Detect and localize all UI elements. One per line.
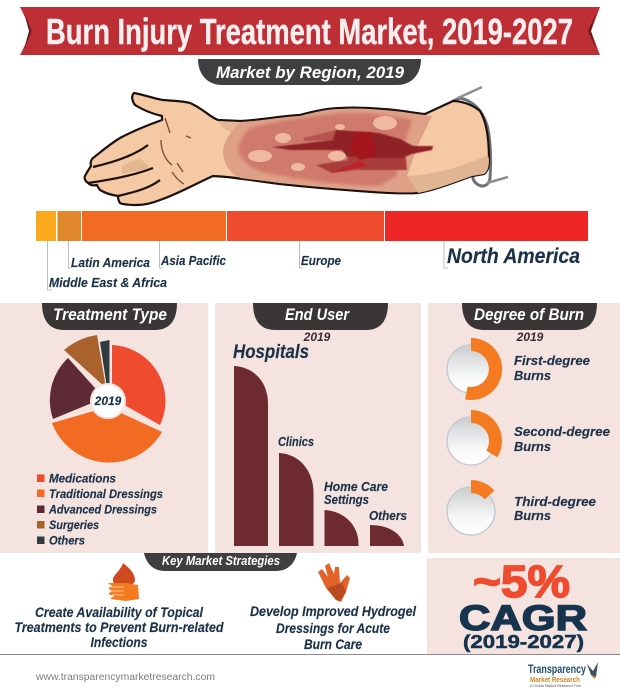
legend: Surgeries [49,518,99,532]
year label: 2019 [303,330,331,344]
CAGR label: CAGR [459,599,587,638]
region labels: North America [447,245,580,268]
donut: third-degree burns [447,480,596,535]
panel: end user: End User [285,305,350,324]
CAGR period: (2019-2027) [463,632,584,652]
panel: treatment type [0,303,208,553]
strategy text: topical treatments: Create Availability of Topical [35,604,204,620]
year label: 2019 [516,330,544,344]
panel: treatment type: Treatment Type [53,305,167,324]
donut: first-degree burns: First-degree [514,353,590,368]
bar chart: Home Care [324,479,388,494]
title banner [20,7,600,55]
strategy text: topical treatments: Treatments to Prevent Burn-related [14,619,224,635]
logo: transparency market research: Market Research [530,675,580,684]
strategy text: hydrogel dressings: Develop Improved Hydrogel [250,603,417,619]
donut: third-degree burns: Third-degree [514,494,596,509]
burn wound [316,150,407,173]
heading: end user [253,303,388,330]
strategy text: hydrogel dressings: Dressings for Acute [276,620,390,636]
legend: Advanced Dressings [48,502,157,516]
strategy text: topical treatments: Infections [90,634,148,650]
legend: Others [49,534,85,548]
strategy text: hydrogel dressings [250,603,417,652]
heading: treatment type [42,303,177,330]
heading: market by region: Market by Region, 2019 [216,63,405,82]
panel: degree of burn [428,303,620,553]
heading: degree of burn [462,303,597,330]
region labels: Europe [301,253,341,268]
legend: Medications [49,472,116,486]
strategy text: hydrogel dressings: Burn Care [304,636,362,652]
panel: key market strategies [14,553,417,652]
donut: third-degree burns: Burns [514,508,551,523]
donut: second-degree burns: Second-degree [514,424,610,439]
website url: www.transparencymarketresearch.com [35,671,215,683]
forearm shading [407,155,489,193]
arm skin [85,93,489,205]
donut: second-degree burns: Burns [514,439,551,454]
bar chart [233,342,407,546]
logo: transparency market research: A Global Market Research Firm [530,684,581,688]
bar chart: Others [369,508,407,523]
illustration: burned arm [85,87,508,205]
region labels: Middle East & Africa [49,275,167,290]
heading: market by region [198,59,421,85]
logo: transparency market research: Transparency [528,662,586,676]
donut: second-degree burns [447,410,610,465]
strategy text: topical treatments [14,604,224,650]
donut: first-degree burns: Burns [514,368,551,383]
pale blisters [373,116,397,130]
region labels: Latin America [71,255,150,270]
bar chart: Hospitals [233,342,309,363]
finger and palm lines [88,145,160,196]
panel: degree of burn: Degree of Burn [474,305,584,324]
donut: first-degree burns [447,338,590,400]
pie chart [50,335,165,463]
CAGR value: ~5% [473,556,570,607]
legend: Traditional Dressings [49,487,163,501]
bar chart: Clinics [278,434,314,449]
cuff [453,98,491,186]
icon: flame over hand [108,563,139,601]
region labels [48,241,580,290]
region labels: Asia Pacific [160,253,227,268]
panel: CAGR [427,556,620,654]
logo: transparency market research [528,662,598,688]
panel: end user [215,303,421,553]
bar chart: Settings [324,492,369,507]
heading: key market strategies [144,553,297,571]
burn region [223,109,432,192]
panel: key market strategies: Key Market Strategies [162,553,280,568]
icon: orange glove [318,563,350,602]
pie chart: 2019 [94,394,122,408]
stacked bar: market by region [36,211,588,241]
legend [37,472,163,548]
